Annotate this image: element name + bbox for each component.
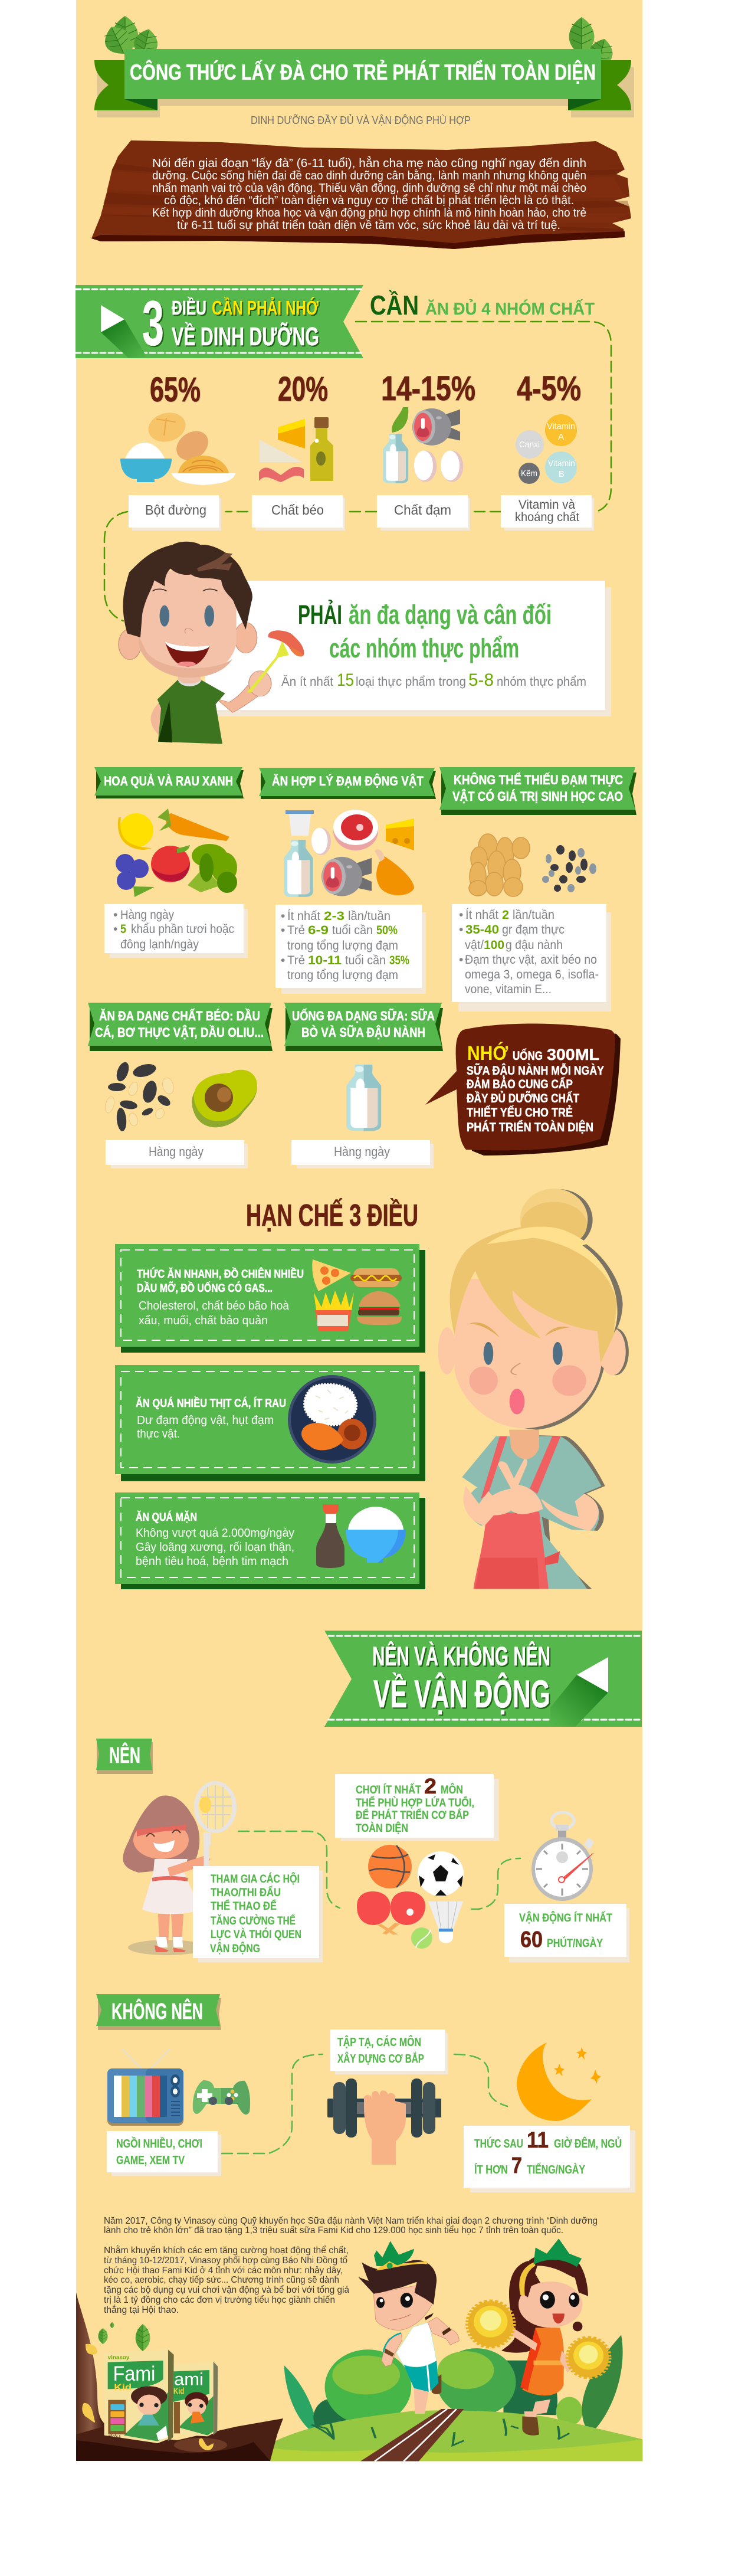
icon: left leaves	[100, 16, 160, 61]
card: fruit and vegetables frequency: khẩu phần tươi hoặc	[131, 922, 234, 936]
icon: back Fami Kid carton	[173, 2362, 218, 2436]
card: sitting too much: NGỒI NHIỀU, CHƠI	[116, 2136, 202, 2151]
icon: front Fami Kid carton: Fami	[113, 2362, 155, 2385]
character: boy with fork	[119, 542, 304, 744]
card: animal protein frequency: tuổi cần	[332, 924, 373, 937]
dashed route connector	[104, 322, 611, 621]
card: plant protein frequency: 100	[484, 938, 504, 952]
card: plant protein frequency: 35-40	[465, 923, 499, 937]
intro text	[152, 156, 586, 232]
card: play at least 2 sports: THỂ PHÙ HỢP LỨA TUỔI,	[356, 1796, 474, 1809]
card: animal protein frequency: tuổi cần	[345, 954, 386, 967]
heading: eat diverse and balanced: các nhóm thực phẩm	[329, 633, 519, 663]
icon: green leaves and cashews	[82, 2322, 214, 2450]
woman body	[462, 1430, 605, 1589]
panel: too salty: Gây loãng xương, rối loạn thận,	[136, 1541, 294, 1554]
ribbon: fruit and vegetables	[94, 767, 244, 798]
card: play at least 2 sports	[335, 1774, 499, 1841]
text: sponsor paragraph two: thắng tại Hội thao.	[104, 2304, 179, 2315]
panel: too much meat	[115, 1365, 425, 1481]
ribbon: animal protein: ĂN HỢP LÝ ĐẠM ĐỘNG VẬT	[272, 774, 424, 788]
title: CÔNG THỨC LẤY ĐÀ CHO TRẺ PHÁT TRIỂN TOÀN DIỆN	[130, 60, 596, 84]
text: sponsor paragraph one: lành cho trẻ khôn lớn” đã trao tặng 1,3 triệu suất sữa Fami Kid cho 129.000 học sinh tiểu học 7 tỉnh trên toàn quốc.	[104, 2225, 563, 2235]
icon: front Fami Kid carton: vinasoy	[108, 2354, 130, 2360]
character: angry woman	[438, 1189, 629, 1589]
card: join sports clubs: THAO/THI ĐẤU	[211, 1886, 281, 1899]
intro text: dưỡng. Cuộc sống hiện đại đề cao dinh dưỡng cân bằng, lành mạnh nhưng không quên	[152, 169, 586, 182]
card: animal protein frequency: trong tổng lượng đạm	[287, 939, 398, 953]
text: at least 15 foods: 15	[337, 670, 354, 690]
section banner: should and should not for exercise: NÊN VÀ KHÔNG NÊN	[372, 1641, 550, 1671]
card: join sports clubs	[193, 1866, 323, 1962]
callout: remember 300ml: NHỚ	[467, 1042, 508, 1065]
card: exercise 60 minutes: PHÚT/NGÀY	[547, 1937, 603, 1950]
card: fruit and vegetables frequency	[104, 904, 248, 958]
icon: fruits and vegetables	[116, 809, 237, 897]
card: play at least 2 sports: 2	[424, 1774, 437, 1798]
ribbon: should: NÊN	[109, 1742, 140, 1768]
card: animal protein frequency: Trẻ	[287, 924, 305, 937]
icon: front Fami Kid carton: Kid	[114, 2383, 132, 2393]
percentages: 14-15%	[381, 369, 475, 408]
label: Vitamin và khoáng chất: khoáng chất	[515, 510, 579, 524]
card: animal protein frequency: 35%	[389, 954, 409, 967]
section banner: should and should not for exercise: VỀ VẬN ĐỘNG	[373, 1672, 550, 1716]
ribbon: fruit and vegetables: HOA QUẢ VÀ RAU XANH	[104, 774, 233, 788]
icon: animal protein foods	[284, 810, 414, 897]
title ribbon	[94, 16, 634, 117]
card: animal protein frequency: •	[281, 954, 285, 967]
page background	[76, 0, 642, 2461]
text: at least 15 foods: loại thực phẩm trong	[356, 675, 466, 689]
card: play at least 2 sports: MÔN	[441, 1783, 463, 1796]
card: staying up late: THỨC SAU	[474, 2136, 523, 2151]
card: milk daily	[291, 1140, 434, 1168]
card: milk daily: Hàng ngày	[334, 1144, 390, 1159]
ribbon: healthy fats: CÁ, BƠ THỰC VẬT, DẦU OLIU...	[95, 1025, 264, 1040]
heading: need 4 nutrient groups: ĂN ĐỦ 4 NHÓM CHẤT	[425, 299, 595, 319]
card: plant protein frequency: vật/	[465, 938, 484, 952]
ribbon: plant protein: VẬT CÓ GIÁ TRỊ SINH HỌC CAO	[452, 789, 623, 804]
dashed connectors: should not	[222, 2054, 507, 2153]
card: play at least 2 sports: ĐỂ PHÁT TRIỂN CƠ BẮP	[356, 1809, 469, 1822]
section banner: 3 things about nutrition: CẦN PHẢI NHỚ	[212, 297, 319, 319]
subtitle: DINH DƯỠNG ĐẦY ĐỦ VÀ VẬN ĐỘNG PHÙ HỢP	[251, 114, 471, 126]
panel: fast food: xấu, muối, chất bảo quản	[139, 1314, 268, 1327]
card: weight lifting	[330, 2030, 448, 2074]
ribbon: healthy fats	[88, 1003, 273, 1051]
panel: fast food	[115, 1244, 425, 1353]
card: animal protein frequency: Trẻ	[287, 954, 305, 967]
panel: too salty: Không vượt quá 2.000mg/ngày	[136, 1527, 294, 1540]
card: plant protein frequency: •	[459, 923, 463, 937]
ribbon: should not: KHÔNG NÊN	[111, 1998, 203, 2024]
scene: chocolate splash	[76, 2293, 283, 2461]
card: weight lifting: XÂY DỰNG CƠ BẮP	[337, 2051, 424, 2066]
icon: avocado	[192, 1070, 257, 1127]
percentages: 4-5%	[517, 369, 581, 408]
callout: remember 300ml: 300ML	[547, 1046, 599, 1063]
heading: limit 3 things: HẠN CHẾ 3 ĐIỀU	[246, 1198, 418, 1233]
icon: carbohydrate foods	[120, 409, 235, 485]
intro text: Nói đến giai đoạn “lấy đà” (6-11 tuổi), hẳn cha mẹ nào cũng nghĩ ngay đến dinh	[152, 156, 586, 170]
card: plant protein frequency: g đậu nành	[506, 938, 563, 952]
section banner: 3 things about nutrition: ĐIỀU	[172, 297, 206, 319]
intro text: cô độc, khó đến “đích” toàn diện và nguy cơ thể chất bị phát triển lệch là có thật.	[164, 194, 574, 207]
card: play at least 2 sports: TOÀN DIỆN	[356, 1822, 408, 1835]
card: plant protein frequency: Đạm thực vật, axit béo no	[465, 953, 597, 967]
panel: too much meat: ĂN QUÁ NHIỀU THỊT CÁ, ÍT RAU	[136, 1397, 286, 1410]
ribbon: healthy fats: ĂN ĐA DẠNG CHẤT BÉO: DẦU	[99, 1009, 260, 1023]
card: join sports clubs: TĂNG CƯỜNG THỂ	[211, 1914, 296, 1927]
icon: fat foods	[259, 417, 333, 482]
card: animal protein frequency: 10-11	[308, 954, 342, 967]
icon: front Fami Kid carton	[104, 2350, 174, 2443]
card: plant protein frequency: gr đạm thực	[502, 923, 565, 937]
card: animal protein frequency	[275, 905, 426, 994]
text: at least 15 foods	[281, 670, 586, 690]
card: exercise 60 minutes: 60	[520, 1927, 543, 1952]
label: Chất béo: Chất béo	[271, 502, 324, 518]
icon: protein foods	[383, 407, 463, 483]
text: at least 15 foods: Ăn ít nhất	[281, 675, 333, 689]
panel: too much meat: thực vật.	[137, 1428, 180, 1441]
panel: too salty: ĂN QUÁ MẶN	[136, 1511, 197, 1524]
icon: vitamin circles: Vitamin	[548, 459, 575, 469]
ribbon: plant protein	[439, 767, 636, 815]
dashed connectors: should	[238, 1831, 520, 1909]
card: plant protein frequency: lần/tuần	[513, 908, 554, 922]
callout: remember 300ml: ĐẦY ĐỦ DƯỠNG CHẤT	[467, 1091, 579, 1105]
heading: eat diverse and balanced	[298, 600, 552, 663]
card: plant protein frequency: omega 3, omega 6, isofla-	[465, 968, 599, 981]
character: girl with racket	[123, 1781, 237, 1955]
percentages	[150, 369, 581, 409]
ribbon: milk: BÒ VÀ SỮA ĐẬU NÀNH	[301, 1025, 425, 1040]
card: animal protein frequency: 50%	[376, 924, 398, 937]
text: at least 15 foods: 5-8	[468, 670, 494, 690]
card: fruit and vegetables frequency: •	[113, 908, 117, 922]
ribbon: milk: UỐNG ĐA DẠNG SỮA: SỮA	[292, 1008, 435, 1023]
callout: remember 300ml: THIẾT YẾU CHO TRẺ	[467, 1106, 573, 1120]
card: fats daily	[106, 1140, 248, 1168]
icon: seeds	[104, 1060, 175, 1132]
label: Vitamin và khoáng chất	[501, 495, 594, 531]
card: join sports clubs: THỂ THAO ĐỂ	[211, 1900, 277, 1913]
card: fruit and vegetables frequency: đông lạnh/ngày	[120, 938, 199, 951]
ribbon: should not	[96, 1994, 221, 2030]
panel: fast food: DẦU MỠ, ĐỒ UỐNG CÓ GAS...	[137, 1282, 273, 1295]
section banner: 3 things about nutrition: 3	[142, 287, 164, 359]
card: plant protein frequency	[452, 904, 611, 1012]
card: plant protein frequency: Ít nhất	[465, 908, 498, 922]
ribbon: should	[96, 1739, 153, 1774]
scene: hills and bushes	[264, 2335, 642, 2461]
text: sponsor paragraph one: Năm 2017, Công ty Vinasoy cùng Quỹ khuyến học Sữa đậu nành Việt Nam triển khai giai đoạn 2 chương trình “Dinh dưỡng	[104, 2215, 598, 2226]
card: weight lifting: TẬP TẠ, CÁC MÔN	[337, 2035, 421, 2049]
callout: remember 300ml: SỮA ĐẬU NÀNH MỖI NGÀY	[467, 1063, 604, 1078]
card: fruit and vegetables frequency: 5	[120, 922, 126, 936]
panel: fast food: Cholesterol, chất béo bão hoà	[139, 1300, 290, 1312]
card: staying up late: ÍT HƠN	[474, 2163, 508, 2176]
card: join sports clubs: VẬN ĐỘNG	[210, 1942, 260, 1955]
icon: vitamin circles: Kẽm	[521, 469, 537, 479]
icon: back Fami Kid carton: Kid	[173, 2387, 184, 2397]
icon: right leaves	[569, 17, 616, 71]
card: plant protein frequency: •	[459, 908, 463, 922]
card: animal protein frequency: •	[281, 909, 285, 923]
card: plant protein frequency: vone, vitamin E...	[465, 983, 552, 996]
card: animal protein frequency: 6-9	[308, 924, 329, 937]
card: animal protein frequency: •	[281, 924, 285, 937]
heading: need 4 nutrient groups: CẦN	[370, 290, 419, 320]
card: plant protein frequency: •	[459, 953, 463, 967]
icon: vitamin circles: Canxi	[519, 440, 540, 450]
label: Chất béo	[252, 495, 345, 531]
icon: dumbbell and hand	[327, 2079, 441, 2165]
wood intro panel	[91, 140, 631, 249]
card: join sports clubs: THAM GIA CÁC HỘI	[211, 1873, 300, 1886]
intro text: nhấn mạnh vai trò của vận động. Thiếu vận động, dinh dưỡng sẽ chỉ như một mái chèo	[152, 182, 586, 195]
percentages: 20%	[278, 370, 328, 408]
card: animal protein frequency: lần/tuần	[348, 909, 391, 923]
text: at least 15 foods: nhóm thực phẩm	[497, 675, 586, 689]
panel: fast food: THỨC ĂN NHANH, ĐỒ CHIÊN NHIỀU	[137, 1268, 304, 1281]
icon: back Fami Kid carton: ami	[174, 2370, 204, 2390]
card: fruit and vegetables frequency: •	[113, 922, 117, 936]
card: animal protein frequency: 2-3	[324, 909, 344, 923]
text: sponsor paragraph two: tặng các bộ dụng cụ vui chơi vận động và bể bơi với tổng giá	[104, 2284, 349, 2295]
card: play at least 2 sports: CHƠI ÍT NHẤT	[356, 1783, 421, 1796]
percentages: 65%	[150, 371, 201, 409]
card: fruit and vegetables frequency: Hàng ngày	[120, 908, 174, 922]
icon: vitamin circles	[516, 414, 577, 484]
card: staying up late	[464, 2126, 635, 2192]
label: Vitamin và khoáng chất: Vitamin và	[519, 498, 575, 512]
section banner: should and should not for exercise	[324, 1631, 642, 1727]
ribbon: plant protein: KHÔNG THỂ THIẾU ĐẠM THỰC	[454, 773, 623, 787]
icon: fast food	[312, 1259, 402, 1331]
icon: television	[107, 2048, 183, 2126]
card: animal protein frequency: Ít nhất	[287, 909, 320, 923]
card: exercise 60 minutes: VẬN ĐỘNG ÍT NHẤT	[519, 1911, 612, 1924]
icon: stopwatch	[531, 1812, 594, 1901]
card: sitting too much	[107, 2131, 221, 2176]
character: cheerleader girl	[468, 2238, 609, 2436]
card: staying up late: 11	[527, 2128, 549, 2153]
panel: eat diverse	[205, 581, 611, 716]
callout: remember 300ml: ĐẢM BẢO CUNG CẤP	[467, 1078, 573, 1091]
icon: vitamin circles: Vitamin	[547, 421, 575, 431]
icon: vitamin circles: A	[558, 432, 564, 442]
section banner: 3 things about nutrition: VỀ DINH DƯỠNG	[172, 322, 319, 351]
callout: remember 300ml	[425, 1023, 621, 1156]
label: Bột đường: Bột đường	[145, 502, 206, 518]
card: plant protein frequency: 2	[502, 908, 509, 922]
text: sponsor paragraph one	[104, 2215, 598, 2235]
card: animal protein frequency: trong tổng lượng đạm	[287, 968, 398, 982]
label: Chất đạm: Chất đạm	[394, 502, 451, 518]
ribbon: animal protein	[259, 768, 436, 799]
panel: too salty: bệnh tiêu hoá, bệnh tim mạch	[136, 1555, 288, 1568]
label: Bột đường	[129, 495, 221, 531]
ribbon: milk	[284, 1003, 443, 1051]
section banner: 3 things about nutrition	[76, 285, 363, 359]
text: sponsor paragraph two: chức Hội thao Fami Kid ở 4 tỉnh với các môn như: nhảy dây,	[104, 2266, 343, 2276]
callout: remember 300ml: UỐNG	[513, 1049, 543, 1063]
text: sponsor paragraph two: từ tháng 10-12/2017, Vinasoy phối hợp cùng Báo Nhi Đồng tổ	[104, 2255, 347, 2266]
heading: eat diverse and balanced: PHẢI	[298, 600, 342, 630]
intro text: Kết hợp dinh dưỡng khoa học và vận động phù hợp chính là mô hình hoàn hảo, cho trẻ	[152, 207, 586, 220]
icon: front Fami Kid carton: SÔCÔLA	[108, 2434, 121, 2440]
card: fats daily: Hàng ngày	[149, 1144, 204, 1159]
icon: milk bottle	[346, 1065, 381, 1131]
heading: need 4 nutrient groups	[370, 290, 595, 320]
label: Chất đạm	[377, 495, 470, 531]
card: join sports clubs: LỰC VÀ THÓI QUEN	[211, 1928, 301, 1941]
icon: game controller	[193, 2080, 250, 2115]
callout: remember 300ml: PHÁT TRIỂN TOÀN DIỆN	[467, 1120, 593, 1134]
card: sitting too much: GAME, XEM TV	[116, 2154, 185, 2167]
icon: soy sauce and rice bowl	[316, 1504, 406, 1568]
icon: sports equipment	[357, 1845, 464, 1949]
woman head	[438, 1226, 629, 1430]
card: staying up late: GIỜ ĐÊM, NGỦ	[554, 2136, 622, 2151]
text: sponsor paragraph two	[104, 2244, 349, 2315]
text: sponsor paragraph two: kéo co, aerobic, chạy tiếp sức... Chương trình cũng sẽ dành	[104, 2275, 339, 2285]
panel: too much meat: Dư đạm động vật, hụt đạm	[137, 1414, 274, 1427]
icon: vitamin circles: B	[559, 469, 565, 479]
icon: moon and stars	[517, 2043, 601, 2121]
heading: eat diverse and balanced: ăn đa dạng và cân đối	[349, 600, 552, 630]
text: sponsor paragraph two: trị là 1 tỷ đồng cho các đơn vị trường tiểu học giành chiến	[104, 2294, 335, 2305]
card: staying up late: 7	[511, 2153, 522, 2178]
card: staying up late: TIẾNG/NGÀY	[527, 2163, 586, 2176]
character: boy running	[358, 2241, 459, 2414]
text: sponsor paragraph two: Nhằm khuyến khích các em tăng cường hoạt động thể chất,	[104, 2244, 349, 2256]
icon: plate of rice and chicken	[288, 1375, 376, 1464]
icon: soybeans and seeds	[469, 834, 596, 896]
panel: too salty	[115, 1492, 425, 1589]
intro text: từ 6-11 tuổi sự phát triển toàn diện về tầm vóc, sức khoẻ lâu dài và trí tuệ.	[177, 219, 560, 232]
card: exercise 60 minutes	[504, 1904, 629, 1962]
